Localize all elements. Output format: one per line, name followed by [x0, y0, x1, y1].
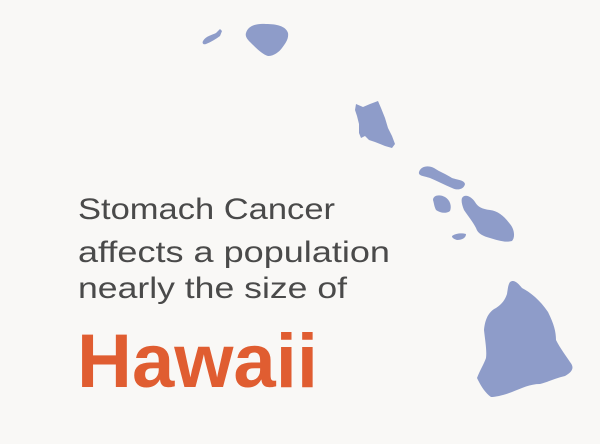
heading: Hawaii: Hawaii [77, 319, 318, 404]
island: Kahoolawe [452, 233, 466, 240]
island: Oahu [355, 101, 395, 148]
line 1: Stomach Cancer [78, 193, 335, 226]
island: Niihau [203, 29, 222, 44]
island: Maui [462, 196, 514, 242]
line 3: nearly the size of [78, 272, 348, 305]
island: Kauai [246, 24, 288, 56]
island: Big Island [477, 281, 572, 397]
island: Molokai [419, 166, 465, 189]
text block: headline [78, 193, 390, 305]
map: Hawaiian islands [203, 24, 572, 397]
line 2: affects a population [78, 236, 390, 269]
island: Lanai [433, 195, 451, 213]
